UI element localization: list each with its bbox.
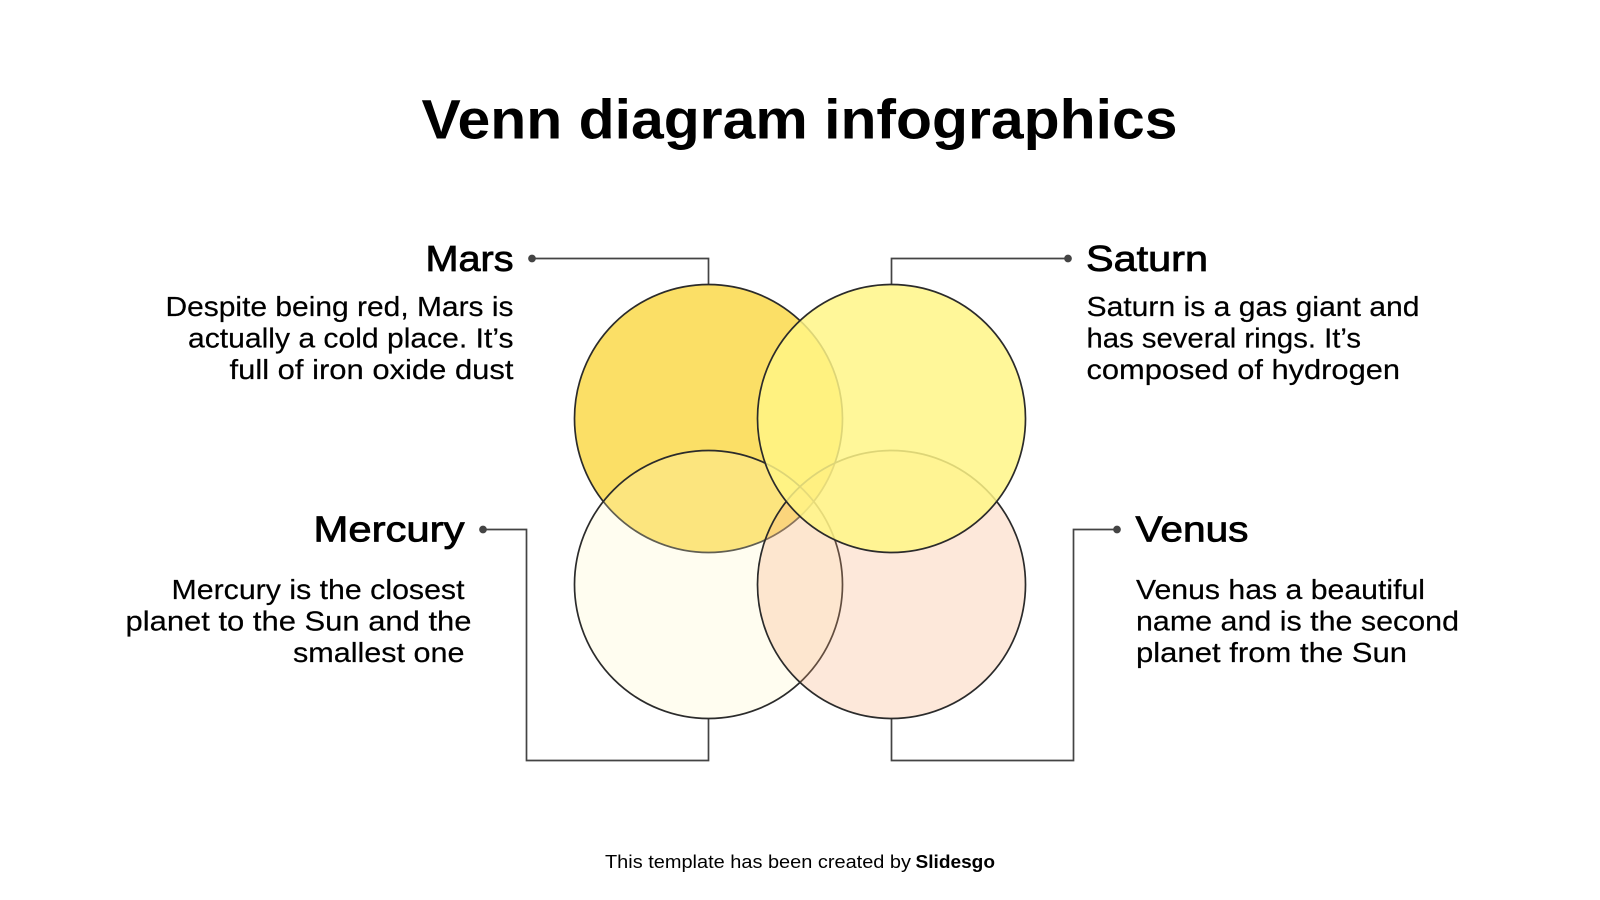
text block: Mercury: Mercury is the closest bbox=[172, 574, 465, 605]
text block: Venus: Venus has a beautiful bbox=[1136, 574, 1425, 605]
title: Venn diagram infographics bbox=[422, 88, 1178, 150]
text block: Mars bbox=[166, 291, 514, 385]
connector: Saturn bbox=[892, 256, 1071, 285]
circle: Venus bbox=[758, 450, 1026, 718]
text block: Saturn: Saturn is a gas giant and bbox=[1086, 291, 1420, 322]
text block: Mars: actually a cold place. It’s bbox=[188, 322, 514, 354]
heading: Venus: Venus bbox=[1136, 508, 1248, 550]
connector: Venus bbox=[892, 526, 1120, 760]
text block: Mercury: planet to the Sun and the bbox=[126, 606, 472, 636]
circle: Saturn bbox=[758, 284, 1026, 552]
heading: Saturn: Saturn bbox=[1086, 238, 1208, 279]
text block: Saturn bbox=[1086, 291, 1420, 385]
circle: Mars bbox=[574, 284, 842, 552]
connector: Mars bbox=[529, 256, 708, 285]
text block: Venus bbox=[1136, 574, 1459, 668]
heading: Mars: Mars bbox=[426, 238, 514, 279]
text block: Saturn: has several rings. It’s bbox=[1086, 322, 1361, 354]
text block: Venus: name and is the second bbox=[1136, 606, 1459, 636]
circle: Mercury bbox=[574, 450, 842, 718]
text block: Mars: Despite being red, Mars is bbox=[166, 291, 514, 322]
text block: Mercury bbox=[126, 574, 472, 668]
footer credit: Slidesgo bbox=[916, 851, 995, 872]
text block: Mercury: smallest one bbox=[293, 637, 464, 668]
text block: Venus: planet from the Sun bbox=[1136, 637, 1407, 668]
venn diagram bbox=[574, 284, 1026, 718]
connector: Mercury bbox=[480, 526, 708, 760]
text block: Saturn: composed of hydrogen bbox=[1086, 354, 1400, 385]
footer credit: This template has been created by bbox=[605, 851, 912, 872]
heading: Mercury: Mercury bbox=[314, 508, 464, 550]
text block: Mars: full of iron oxide dust bbox=[230, 354, 514, 385]
